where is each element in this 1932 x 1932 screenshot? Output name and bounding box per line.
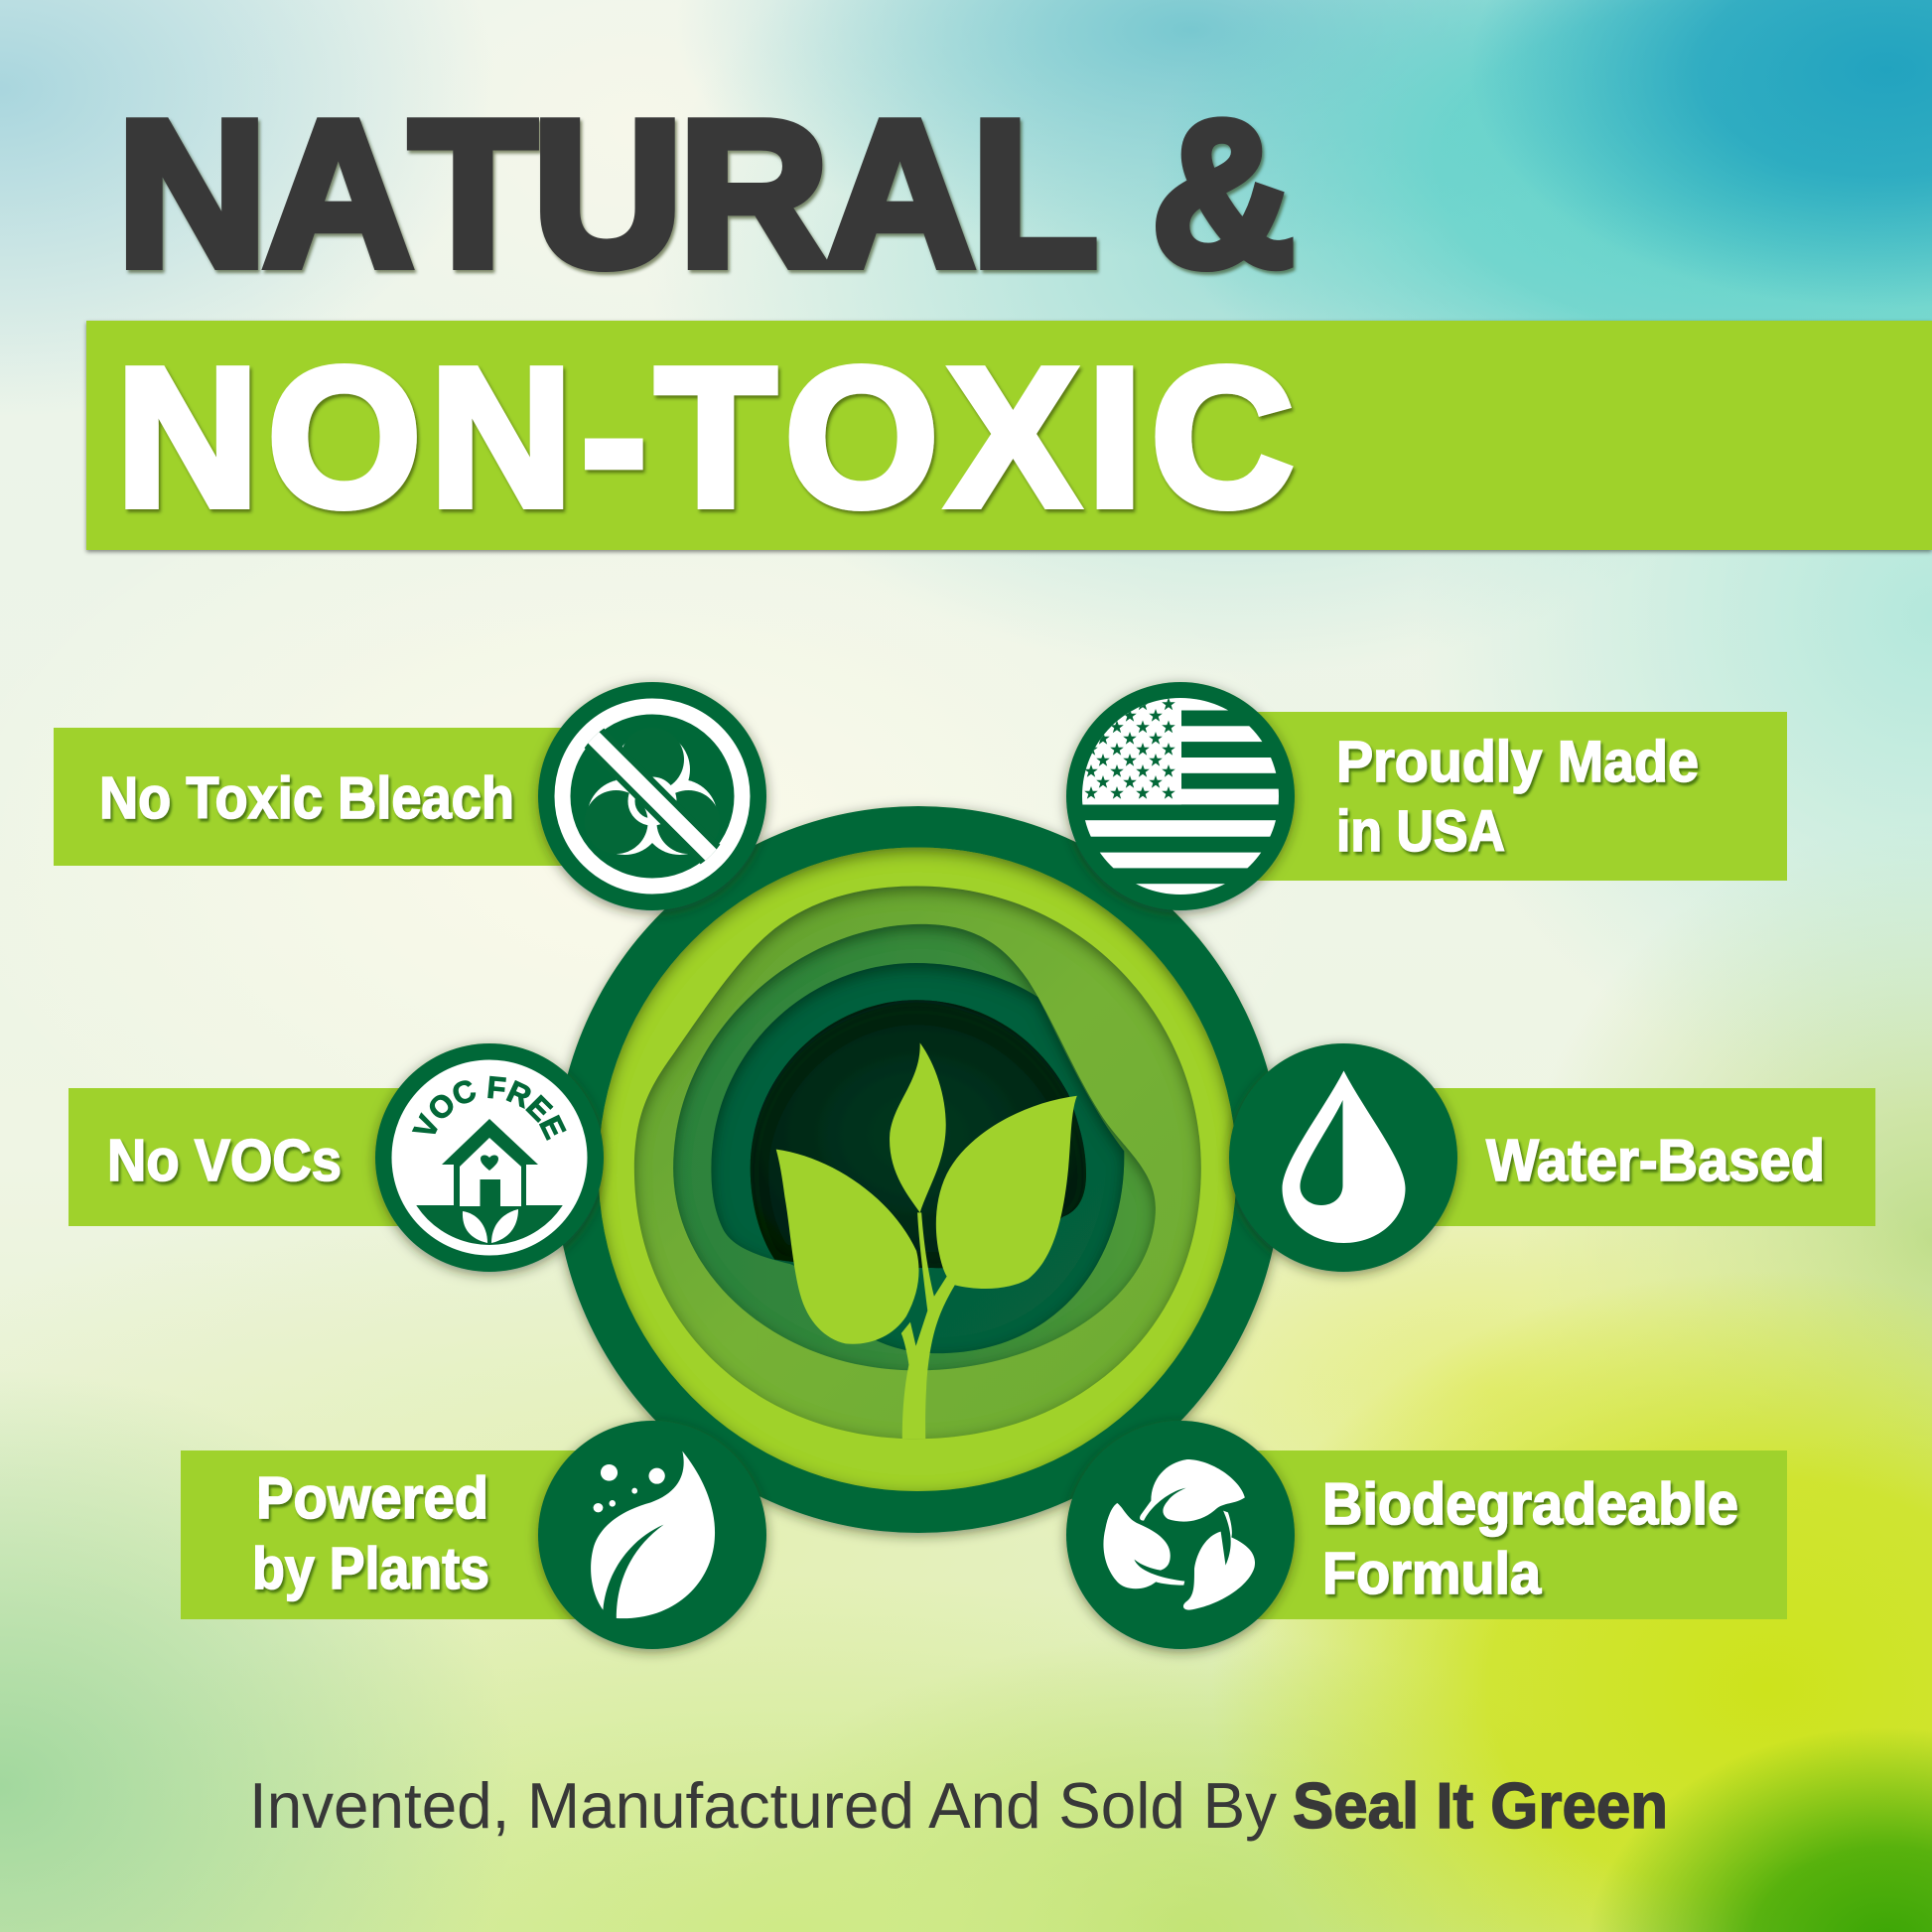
badge disc (1066, 682, 1295, 910)
curved VOC FREE text: VOC FREE (411, 1076, 567, 1141)
badge disc (1066, 1421, 1295, 1649)
title ampersand: & (1152, 78, 1295, 310)
bar (1231, 1450, 1787, 1619)
label: No Toxic Bleach (54, 728, 610, 866)
teal layer (711, 963, 1124, 1353)
light green layer (599, 847, 1237, 1491)
drop shape (1283, 1070, 1406, 1243)
bar (1410, 1088, 1875, 1226)
label: Biodegradeable Formula (1231, 1450, 1787, 1619)
label text: Proudly Made (1336, 730, 1699, 794)
banner: NON-TOXIC (86, 321, 1932, 550)
label text: Water-Based (1486, 1128, 1825, 1193)
dark core layer (751, 1000, 1086, 1268)
icon: water drop (1229, 1043, 1457, 1272)
label text: No VOCs (107, 1128, 342, 1193)
ground segment (416, 1205, 563, 1245)
icon: leaf with bubbles (538, 1421, 766, 1649)
prohibition ring (562, 707, 743, 886)
footer brand name: Seal It Green (1293, 1769, 1668, 1842)
icon: recycling leaves (1066, 1421, 1295, 1649)
footer regular part: Invented, Manufactured And Sold By (249, 1769, 1277, 1842)
house (442, 1119, 538, 1206)
right leaf (936, 1096, 1077, 1289)
icon: VOC free house (367, 1038, 612, 1283)
title: NATURAL & (117, 78, 1295, 310)
central paper-cut emblem (555, 806, 1282, 1533)
label text: Biodegradeable (1322, 1471, 1738, 1537)
bar (1231, 712, 1787, 881)
outer dark ring (555, 806, 1282, 1533)
white inner disc (391, 1060, 588, 1255)
stem (901, 1212, 955, 1439)
green layer (673, 924, 1156, 1370)
banner bar (86, 321, 1932, 550)
label text: No Toxic Bleach (99, 765, 514, 831)
olive layer (634, 886, 1201, 1439)
sprout icon (776, 1042, 1077, 1439)
flag stripes and stars (1082, 697, 1281, 896)
label text line 2: Formula (1322, 1541, 1542, 1606)
footer text (249, 1769, 1668, 1842)
centre leaf (890, 1042, 946, 1212)
three leaves (1103, 1459, 1255, 1610)
label: Proudly Made in USA (1231, 712, 1787, 881)
badge disc (1229, 1043, 1457, 1272)
label text: Powered (256, 1465, 488, 1531)
icon: US flag (1066, 682, 1295, 910)
label: No VOCs (69, 1088, 406, 1226)
icon: no biohazard (538, 682, 766, 910)
title word: NATURAL (117, 78, 1098, 310)
badge disc (538, 1421, 766, 1649)
bar (181, 1450, 598, 1619)
leaf and bubbles (591, 1451, 715, 1618)
small leaves (463, 1209, 518, 1243)
label: Powered by Plants (181, 1450, 598, 1619)
left leaf (776, 1150, 919, 1344)
label text line 2: by Plants (252, 1536, 489, 1601)
banner heading: NON-TOXIC (116, 328, 1294, 548)
badge disc (375, 1043, 604, 1272)
bar (69, 1088, 406, 1226)
label: Water-Based (1410, 1088, 1875, 1226)
badge disc (538, 682, 766, 910)
bar (54, 728, 610, 866)
biohazard symbol (585, 728, 720, 863)
label text line 2: in USA (1336, 799, 1505, 864)
layered paper-cut disc (599, 847, 1237, 1491)
